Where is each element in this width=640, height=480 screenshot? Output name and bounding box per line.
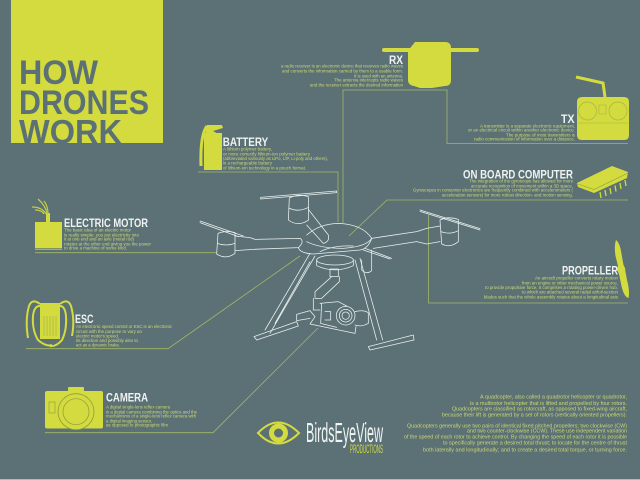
panel: RX: and the receiver extracts the desired information [310,83,403,89]
text block: quadcopter description: Quadcopters are classified as rotorcraft, as opposed to fixed-wing aircraft, [452,407,627,413]
panel: electric motor: to drive a machine of some kind. [64,246,127,252]
title block: HOW [19,54,99,92]
title block: DRONES [19,84,149,122]
text: PRODUCTIONS [350,444,383,456]
mount and gimbal [315,255,353,298]
front rotor [362,248,392,273]
panel: ESC: its direction and possibly also to [76,338,138,344]
panel: TX [468,77,629,143]
panel: propeller: to provide propulsive force. It comprises a rotating power-driven hub, [485,285,618,291]
body [298,223,372,254]
text block: quadcopter description: to specifically generate a desired total thrust; to locate for the centre of thrust [443,441,628,447]
panel: TX: A transmitter is a separate electronic equipment, [480,124,575,130]
panel: RX: RX [389,55,403,67]
panel: on board computer: accurate recognition of movement within a 3D space. [471,183,573,189]
panel: TX: TX [561,114,575,126]
gimbal camera [297,298,368,333]
drone illustration [200,191,480,350]
text block: quadcopter description: Quadcopters generally use two pairs of identical fixed pitched propellers; two clockwise (CW) [407,423,627,429]
panel: battery: of lithium-ion technology in a pouch format. [223,166,306,172]
icon: eye [258,422,299,444]
panel: electric motor [32,199,151,252]
panel: RX: The antenna intercepts radio waves [334,78,404,84]
title block: WORK [19,114,122,152]
panel: electric motor: it at one end and an axle (metal rod) [64,237,134,243]
panel: ESC: An electronic speed control or ESC is an electronic [76,324,173,330]
icon: motor [32,199,62,250]
icon: microchip [577,166,628,198]
panel: propeller [484,240,629,301]
panel: electric motor: The basic idea of an electric motor [64,228,131,234]
panel: battery: A lithium polymer battery, [223,147,272,153]
icon: camera [45,387,103,430]
panel: ESC: circuit with the purpose to vary an [76,329,142,335]
icon: TX transmitter [576,77,629,140]
panel: ESC: ESC [75,314,94,326]
panel: TX: The purpose of most transmitters is [506,133,576,139]
panel: TX: or an electrical circuit within another electronic device. [468,128,575,134]
left rotor [200,221,302,257]
panel: battery: or more correctly lithium-ion polymer battery [223,152,311,158]
panel: RX: a radio receiver is an electronic device that receives radio waves [281,64,404,70]
landing gear [254,253,414,350]
text block: quadcopter description: both laterally and longitudinally; and to create a desired total torque, or turning force. [423,448,627,454]
panel: propeller: from an engine or other mechanical power source, [522,281,618,287]
panel: RX: and converts the information carried by them to a usable form. [282,69,403,75]
text block: quadcopter description: A quadcopter, also called a quadrotor helicopter or quadrotor, [480,395,627,401]
text: BirdsEyeView [306,417,383,448]
text block: quadcopter description: is a multirotor helicopter that is lifted and propelled by four rotors. [470,401,627,407]
panel: on board computer: acceleration sensors) for more robust direction- and motion sensing. [442,193,573,199]
panel: camera: A digital single-lens reflex camera [106,405,170,411]
icon: battery [201,125,223,170]
panel: TX: radio communication of information over a distance. [474,137,575,143]
panel: propeller: An aircraft propeller converts rotary motion [535,276,618,282]
icon: propeller [615,240,629,298]
panel: RX: It is used with an antenna. [354,73,403,79]
panel: on board computer: The integration of the gyroscope has allowed for more [469,179,573,185]
panel: on board computer: ON BOARD COMPUTER [463,169,574,181]
panel: electric motor: ELECTRIC MOTOR [64,218,149,230]
panel: battery: BATTERY [223,137,268,149]
logo [258,417,383,456]
text block: quadcopter description: because their lift is generated by a set of rotors (vertically oriented propellers). [442,413,627,419]
panel: camera: CAMERA [106,392,148,404]
panel: camera: a digital imaging sensor, [106,419,152,425]
text block: quadcopter description: of the speed of each rotor to achieve control. By changing the speed of each rotor it is possible [404,435,627,441]
title block [11,0,163,152]
connector lines [26,90,628,433]
panel: camera [45,387,197,430]
panel: battery [201,125,328,172]
icon: ESC [27,301,73,346]
icon: RX receiver [382,42,479,88]
panel: battery: is a rechargeable battery [223,161,273,167]
panel: ESC: electric motor's speed, [76,333,119,339]
panel: on board computer: Gyroscopes in consumer electronics are frequently combined with accelerometers ( [413,188,573,194]
panel: electric motor: rotates at the other end giving you the power [64,242,151,248]
panel: ESC [27,301,173,349]
text block: quadcopter description: and two counter-clockwise (CCW). These use independent variation [467,429,627,435]
panel: propeller: to which are attached several radial airfoil-section [522,290,618,296]
panel: propeller: PROPELLER [562,265,619,277]
panel: camera: is a digital camera combining the optics and the [106,409,197,415]
panel: electric motor: is really simple: you put electricity into [64,233,139,239]
panel: battery: (abbreviated variously as LiPo, LIP, Li-poly and others), [223,156,328,162]
panel: on board computer [413,166,628,199]
panel: camera: mechanisms of a single-lens reflex camera with [106,414,196,420]
rear rotor [261,191,337,243]
text block: quadcopter description [404,395,628,454]
panel: propeller: blades such that the whole assembly rotates about a longitudinal axis [484,295,619,301]
panel: ESC: act as a dynamic brake. [76,343,120,349]
panel: RX [281,42,479,89]
right rotor [372,210,480,248]
panel: camera: as opposed to photographic film [106,423,168,429]
